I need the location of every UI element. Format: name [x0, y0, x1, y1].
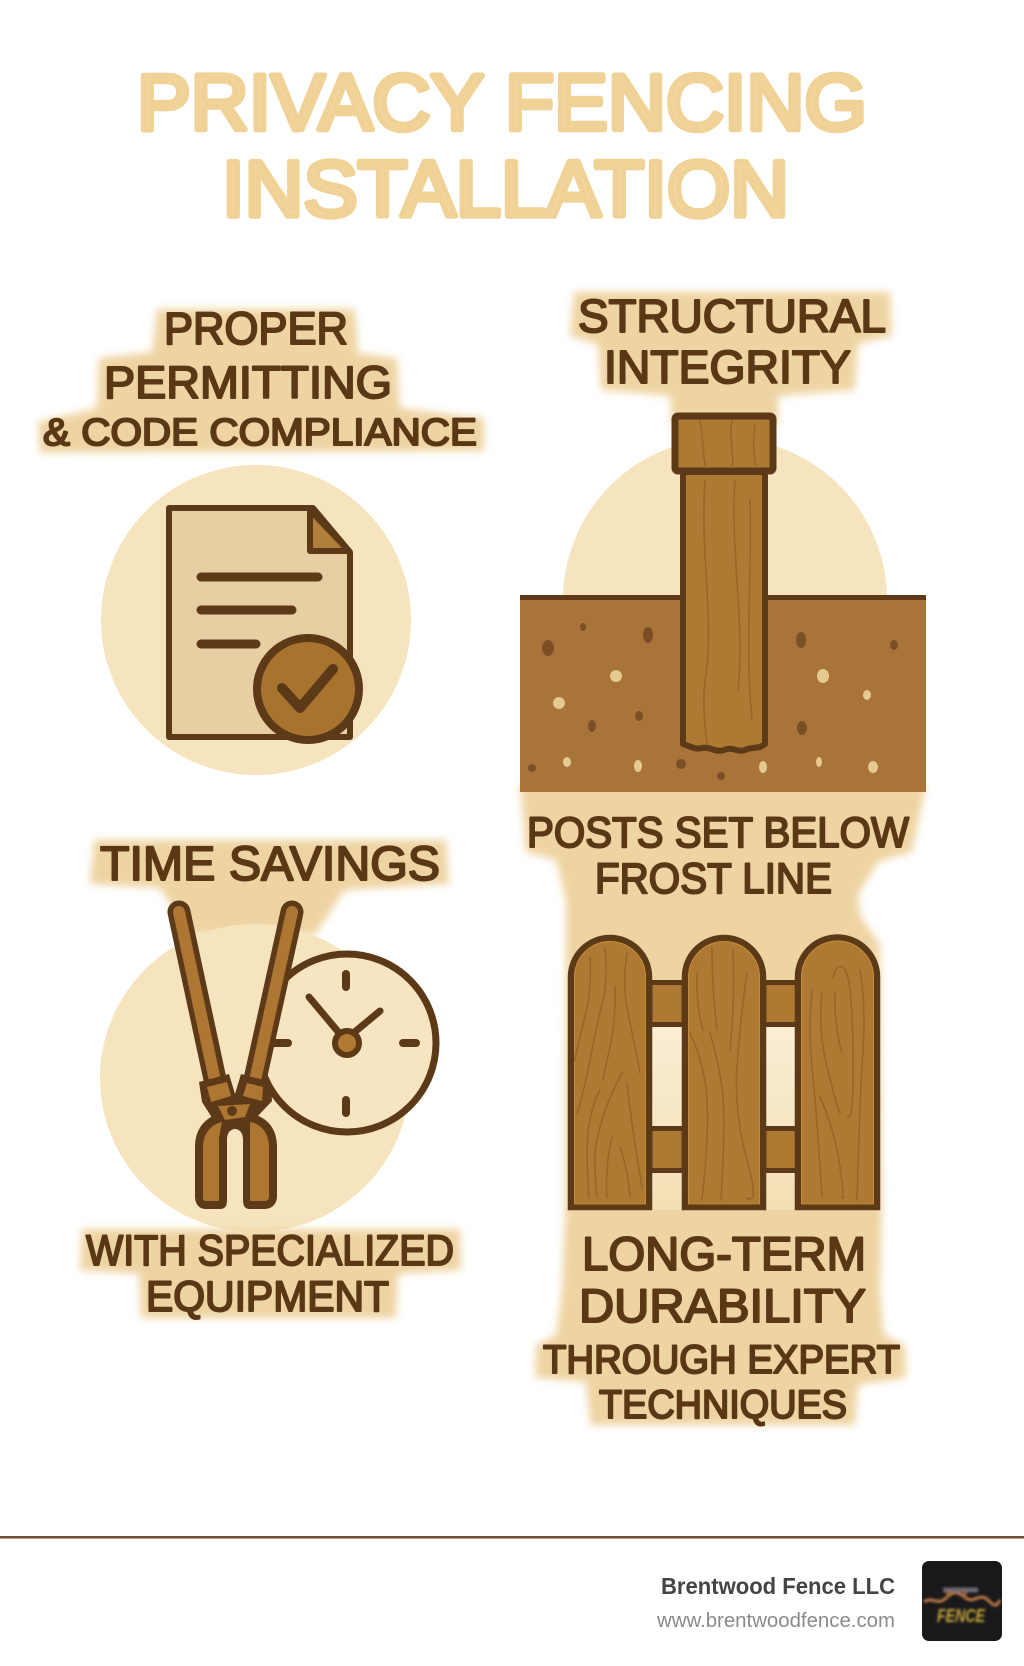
icon circle: time savings	[100, 924, 410, 1232]
title: INSTALLATION	[222, 144, 789, 233]
heading: proper permitting	[43, 303, 477, 454]
icon circle: post	[563, 438, 887, 600]
heading: long-term durability: TECHNIQUES	[599, 1383, 847, 1427]
heading: proper permitting: & CODE COMPLIANCE	[43, 412, 477, 454]
heading: long-term durability: DURABILITY	[579, 1279, 866, 1332]
icon: loppers	[179, 912, 292, 1209]
icon: document with check	[169, 508, 359, 740]
wood grain	[575, 947, 864, 1200]
picket highlights	[574, 941, 874, 1204]
icon: fence	[571, 938, 877, 1207]
panel: proper permitting	[38, 303, 484, 775]
heading: structural integrity: INTEGRITY	[604, 341, 851, 393]
heading: time savings: TIME SAVINGS	[100, 838, 440, 891]
soil	[520, 595, 926, 792]
icon circle: permit	[101, 465, 411, 775]
panel: structural integrity and durability	[520, 290, 926, 1427]
title	[137, 58, 867, 233]
heading: structural integrity: STRUCTURAL	[578, 290, 886, 342]
pickets	[571, 938, 877, 1207]
text: posts set below frost line: FROST LINE	[595, 855, 832, 903]
heading glow: with specialized equipment	[80, 1229, 461, 1318]
rails	[650, 982, 798, 1170]
text: with specialized equipment: WITH SPECIALIZED	[86, 1227, 454, 1275]
icon: post	[675, 416, 773, 751]
background between pickets	[650, 1024, 796, 1210]
text: with specialized equipment	[86, 1227, 454, 1321]
heading glow: time savings	[90, 840, 449, 935]
column glow	[520, 785, 926, 1425]
heading: long-term durability	[543, 1227, 900, 1427]
logo	[922, 1561, 1002, 1641]
heading glow: permitting	[38, 309, 484, 453]
company name: Brentwood Fence LLC	[661, 1573, 895, 1599]
heading: proper permitting: PERMITTING	[104, 357, 392, 408]
heading: long-term durability: THROUGH EXPERT	[543, 1338, 900, 1382]
heading: long-term durability: LONG-TERM	[582, 1227, 866, 1280]
text: posts set below frost line	[527, 809, 909, 903]
panel: time savings	[80, 838, 461, 1321]
heading: proper permitting: PROPER	[164, 303, 348, 354]
website: www.brentwoodfence.com	[656, 1610, 895, 1632]
heading glow: structural integrity	[570, 292, 892, 425]
text: with specialized equipment: EQUIPMENT	[146, 1273, 389, 1321]
text: posts set below frost line: POSTS SET BELOW	[527, 809, 909, 857]
heading: structural integrity	[578, 290, 886, 393]
icon: clock	[258, 954, 436, 1132]
title: PRIVACY FENCING	[137, 58, 867, 146]
footer	[0, 1536, 1024, 1641]
logo: FENCE	[937, 1606, 986, 1626]
